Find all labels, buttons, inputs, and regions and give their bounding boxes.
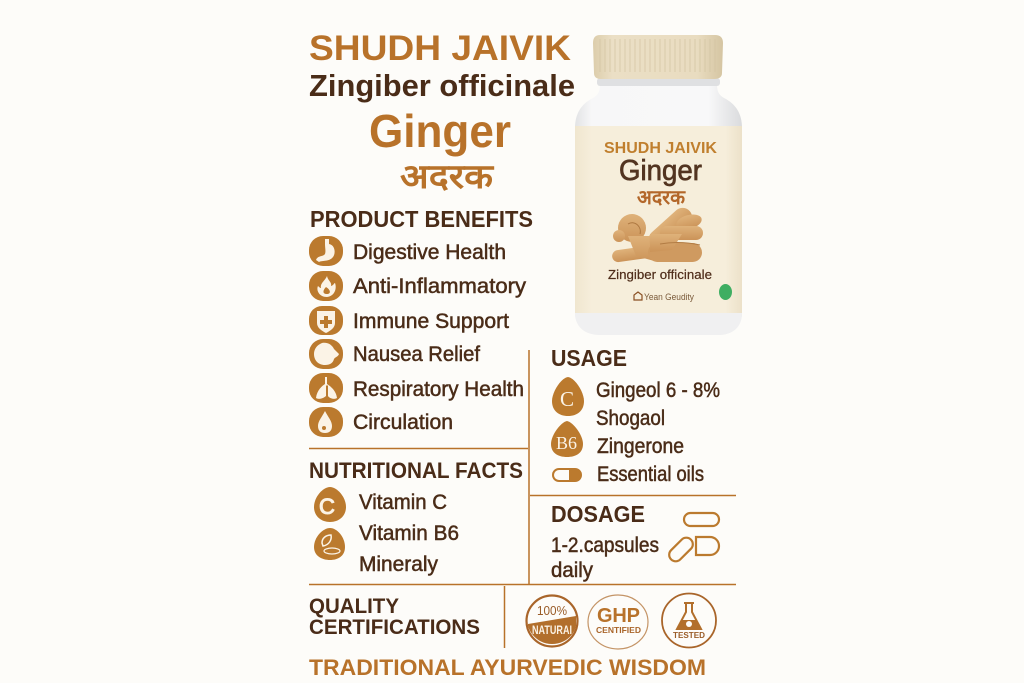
badge: ghp certified [588, 595, 648, 649]
label maker: Yean Geudity [644, 292, 694, 302]
icon: minerals [314, 528, 345, 560]
badge: 100% natural [526, 596, 578, 646]
compound: gingeol: Gingeol 6 - 8% [596, 379, 720, 402]
badge: tested [662, 594, 716, 648]
bottle neck shadow [597, 78, 720, 86]
nutrient: minerals: Mineraly [359, 553, 438, 576]
icon: b6 drop [551, 421, 583, 457]
cap [593, 35, 723, 79]
label ginger: Ginger [619, 155, 702, 187]
nutrition heading: NUTRITIONAL FACTS [309, 458, 523, 483]
footer tagline: TRADITIONAL AYURVEDIC WISDOM [309, 655, 706, 680]
ginger heading: Ginger [369, 105, 511, 157]
panel: dosage [551, 501, 719, 582]
benefit: nausea relief [309, 339, 480, 369]
badge: ghp certified: GHP [597, 605, 640, 627]
benefit: circulation [309, 407, 453, 437]
label brand: SHUDH JAIVIK [604, 140, 718, 157]
usage heading: USAGE [551, 345, 627, 371]
hindi heading: अदरक [400, 158, 495, 196]
title block [309, 29, 575, 196]
benefit: immune support: Immune Support [353, 310, 509, 333]
certifications heading line two: CERTIFICATIONS [309, 616, 480, 639]
badge: 100% natural: NATURAI [532, 623, 572, 637]
icon: shield [309, 306, 343, 335]
nutrient: vitamin c: Vitamin C [359, 491, 447, 514]
icon: capsules [667, 513, 719, 564]
panel: nutritional facts [309, 458, 523, 576]
badge: 100% natural: 100% [537, 603, 567, 618]
icon: lungs [309, 373, 343, 403]
label logo [634, 292, 642, 300]
icon: vitamin c [314, 487, 346, 522]
benefit: respiratory health: Respiratory Health [353, 378, 524, 401]
badge: ghp certified: CENTIFIED [596, 625, 641, 635]
bottle [575, 35, 742, 335]
label [575, 126, 742, 313]
dosage heading: DOSAGE [551, 501, 645, 527]
brand heading: SHUDH JAIVIK [309, 29, 571, 68]
icon: b6 drop: B6 [556, 433, 577, 453]
icon: oil capsule [553, 469, 581, 481]
badge: tested: TESTED [673, 630, 705, 640]
icon: drop [309, 407, 343, 437]
panel: usage [551, 345, 720, 486]
icon: vitamin c: C [319, 494, 335, 519]
icon: c drop [552, 377, 584, 416]
compound: shogaol: Shogaol [596, 407, 665, 430]
icon: flame [309, 271, 343, 301]
icon: stomach [309, 236, 343, 266]
icon: head profile [309, 339, 343, 369]
compound: zingerone: Zingerone [597, 435, 684, 458]
dosage text line one: 1-2.capsules [551, 534, 659, 557]
nutrient: vitamin b6: Vitamin B6 [359, 522, 459, 545]
certifications heading: QUALITY [309, 595, 399, 618]
label hindi: अदरक [637, 187, 687, 209]
benefit: respiratory health [309, 373, 524, 403]
green dot [719, 284, 732, 300]
benefit: digestive health [309, 236, 506, 266]
benefit: digestive health: Digestive Health [353, 241, 506, 264]
dosage text line two: daily [551, 559, 593, 582]
panel: quality certifications [309, 594, 716, 649]
bottle body [575, 84, 742, 335]
compound: essential oils: Essential oils [597, 463, 704, 486]
benefit: anti-inflammatory: Anti-Inflammatory [353, 275, 527, 298]
ginger root illustration [611, 204, 703, 263]
benefit: nausea relief: Nausea Relief [353, 343, 480, 366]
benefit: anti-inflammatory [309, 271, 527, 301]
panel: product benefits [309, 206, 533, 437]
label latin name: Zingiber officinale [608, 267, 712, 282]
latin name heading: Zingiber officinale [309, 68, 575, 103]
bottle base shade [575, 313, 742, 335]
icon: c drop: C [560, 387, 574, 411]
benefit: immune support [309, 306, 509, 335]
benefits heading: PRODUCT BENEFITS [310, 206, 533, 232]
cap ridges [600, 39, 715, 72]
benefit: circulation: Circulation [353, 411, 453, 434]
